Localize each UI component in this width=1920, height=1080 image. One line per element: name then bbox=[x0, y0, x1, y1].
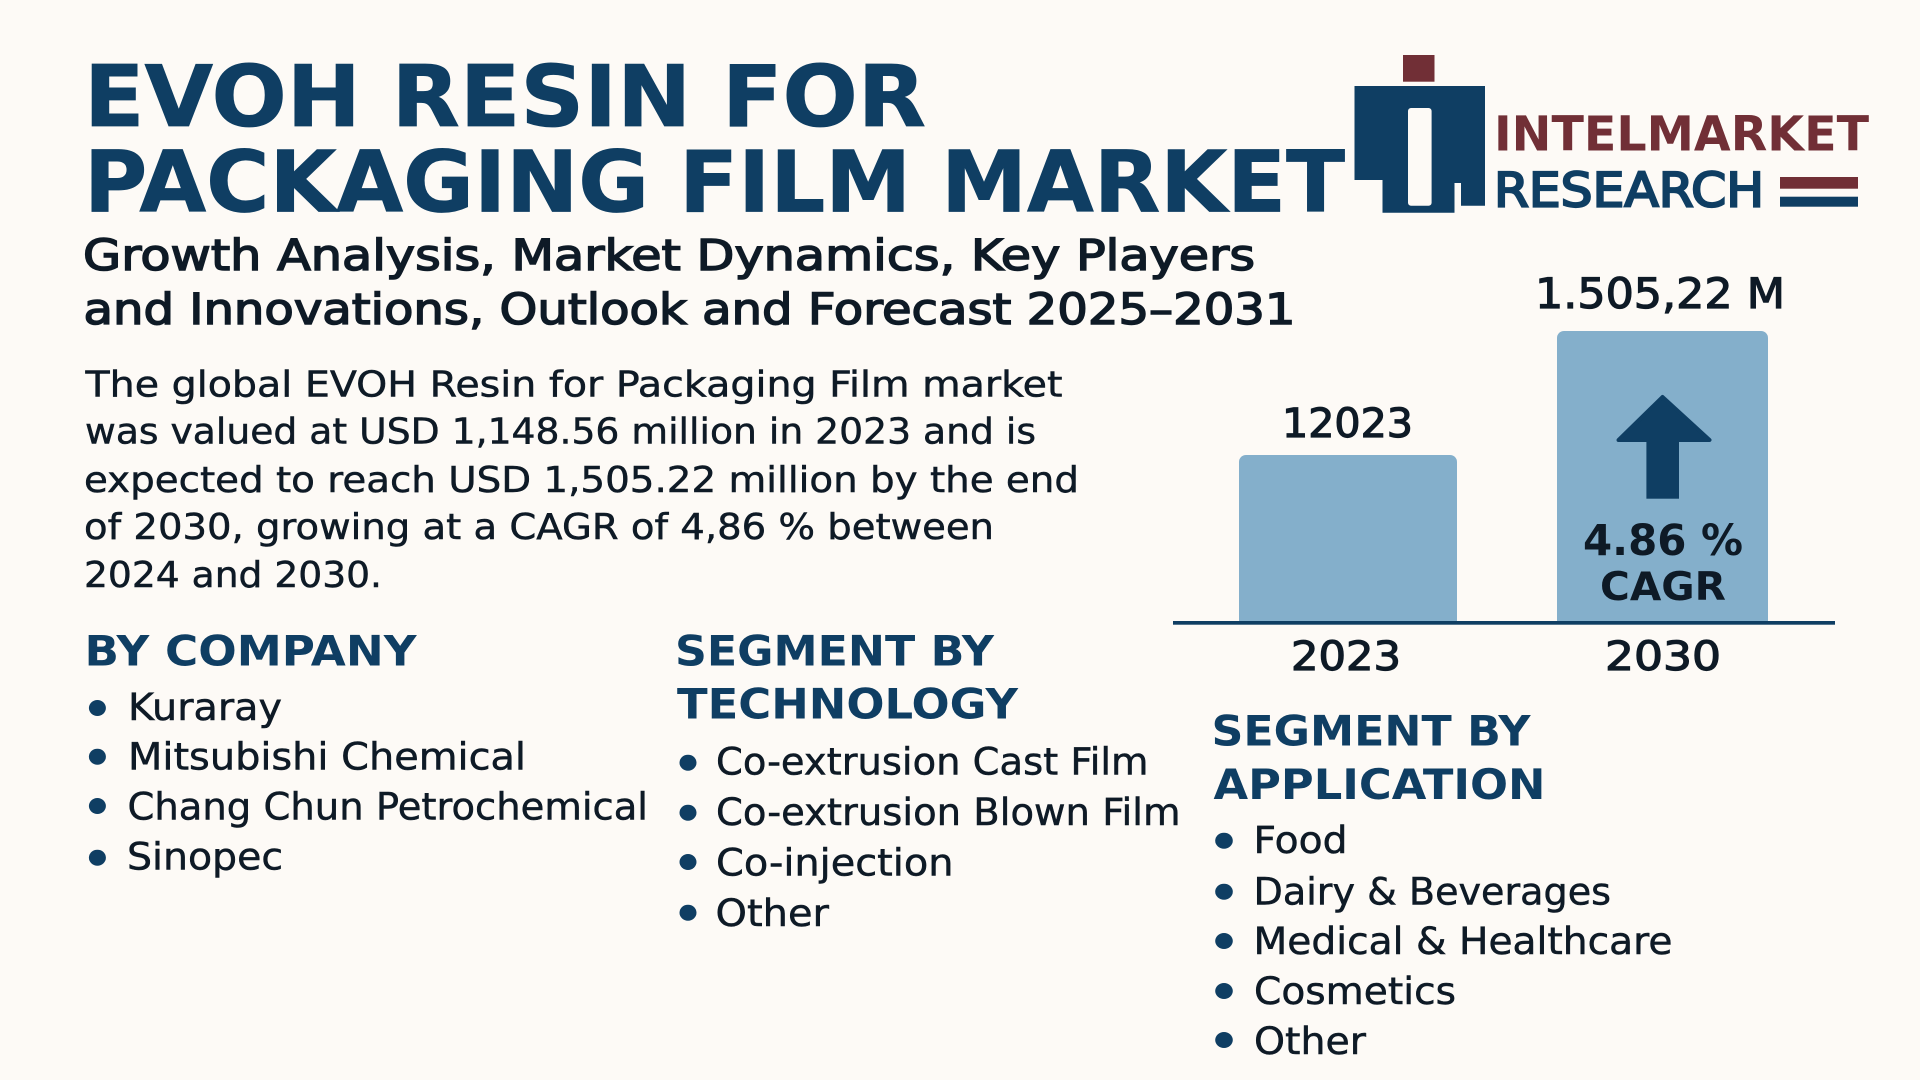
logo wordmark bbox=[1494, 107, 1869, 219]
intro paragraph: was valued at USD 1,148.56 million in 2023 and is bbox=[85, 412, 1036, 453]
list: applications: Other bbox=[1254, 1020, 1367, 1063]
heading: by company: BY COMPANY bbox=[84, 626, 417, 676]
list: companies: Kuraray bbox=[128, 686, 282, 729]
CAGR callout bbox=[1583, 516, 1743, 610]
title: EVOH RESIN FOR bbox=[84, 48, 926, 147]
list: technologies: Co-injection bbox=[716, 842, 954, 884]
value label 2030: 1.505,22 M bbox=[1535, 269, 1785, 318]
list: companies bbox=[89, 686, 648, 878]
list: technologies: Co-extrusion Blown Film bbox=[716, 791, 1180, 834]
heading: segment by application bbox=[1212, 706, 1546, 809]
axis label 2023: 2023 bbox=[1291, 634, 1401, 680]
intro paragraph: of 2030, growing at a CAGR of 4,86 % between bbox=[84, 507, 994, 548]
value label 2023: 12023 bbox=[1282, 401, 1413, 447]
intro paragraph: The global EVOH Resin for Packaging Film market bbox=[84, 365, 1062, 406]
CAGR callout: 4.86 % bbox=[1583, 516, 1743, 566]
panel: by company bbox=[84, 626, 648, 878]
bar: 2023 bbox=[1239, 455, 1457, 621]
chart baseline bbox=[1173, 621, 1835, 625]
logo: Intelmarket Research bbox=[1354, 55, 1869, 219]
list: companies: Mitsubishi Chemical bbox=[128, 735, 526, 778]
heading: segment by technology bbox=[675, 626, 1019, 729]
panel: segment by application bbox=[1212, 706, 1672, 1063]
list: applications: Dairy & Beverages bbox=[1254, 870, 1611, 914]
heading: segment by application: SEGMENT BY bbox=[1212, 706, 1531, 756]
list: applications: Food bbox=[1254, 819, 1348, 862]
icon: logo mark bbox=[1354, 55, 1485, 213]
arrow: growth bbox=[1618, 397, 1710, 499]
heading: segment by technology: SEGMENT BY bbox=[675, 626, 995, 676]
list: applications bbox=[1215, 819, 1672, 1063]
intro paragraph: expected to reach USD 1,505.22 million by the end bbox=[84, 460, 1079, 501]
CAGR callout: CAGR bbox=[1600, 565, 1726, 610]
list: companies: Sinopec bbox=[127, 835, 283, 878]
title bbox=[84, 48, 1345, 232]
bar: 2030 bbox=[1557, 331, 1768, 621]
bar chart bbox=[1173, 269, 1835, 680]
panel: segment by technology bbox=[675, 626, 1180, 935]
intro paragraph bbox=[84, 365, 1079, 596]
subtitle: and Innovations, Outlook and Forecast 2025–2031 bbox=[84, 285, 1296, 335]
subtitle bbox=[83, 231, 1296, 335]
subtitle: Growth Analysis, Market Dynamics, Key Players bbox=[83, 231, 1255, 281]
list: technologies bbox=[680, 740, 1180, 935]
title: PACKAGING FILM MARKET bbox=[84, 134, 1345, 232]
list: technologies: Other bbox=[716, 892, 830, 935]
list: technologies: Co-extrusion Cast Film bbox=[716, 740, 1148, 783]
heading: segment by application: APPLICATION bbox=[1214, 760, 1546, 809]
axis label 2030: 2030 bbox=[1605, 634, 1721, 680]
logo stripes bbox=[1780, 177, 1858, 207]
list: applications: Cosmetics bbox=[1254, 970, 1456, 1013]
logo wordmark: INTELMARKET bbox=[1494, 107, 1869, 163]
intro paragraph: 2024 and 2030. bbox=[84, 555, 382, 596]
list: companies: Chang Chun Petrochemical bbox=[128, 785, 648, 828]
heading: segment by technology: TECHNOLOGY bbox=[677, 680, 1019, 729]
logo wordmark: RESEARCH bbox=[1494, 164, 1764, 219]
list: applications: Medical & Healthcare bbox=[1254, 920, 1672, 963]
